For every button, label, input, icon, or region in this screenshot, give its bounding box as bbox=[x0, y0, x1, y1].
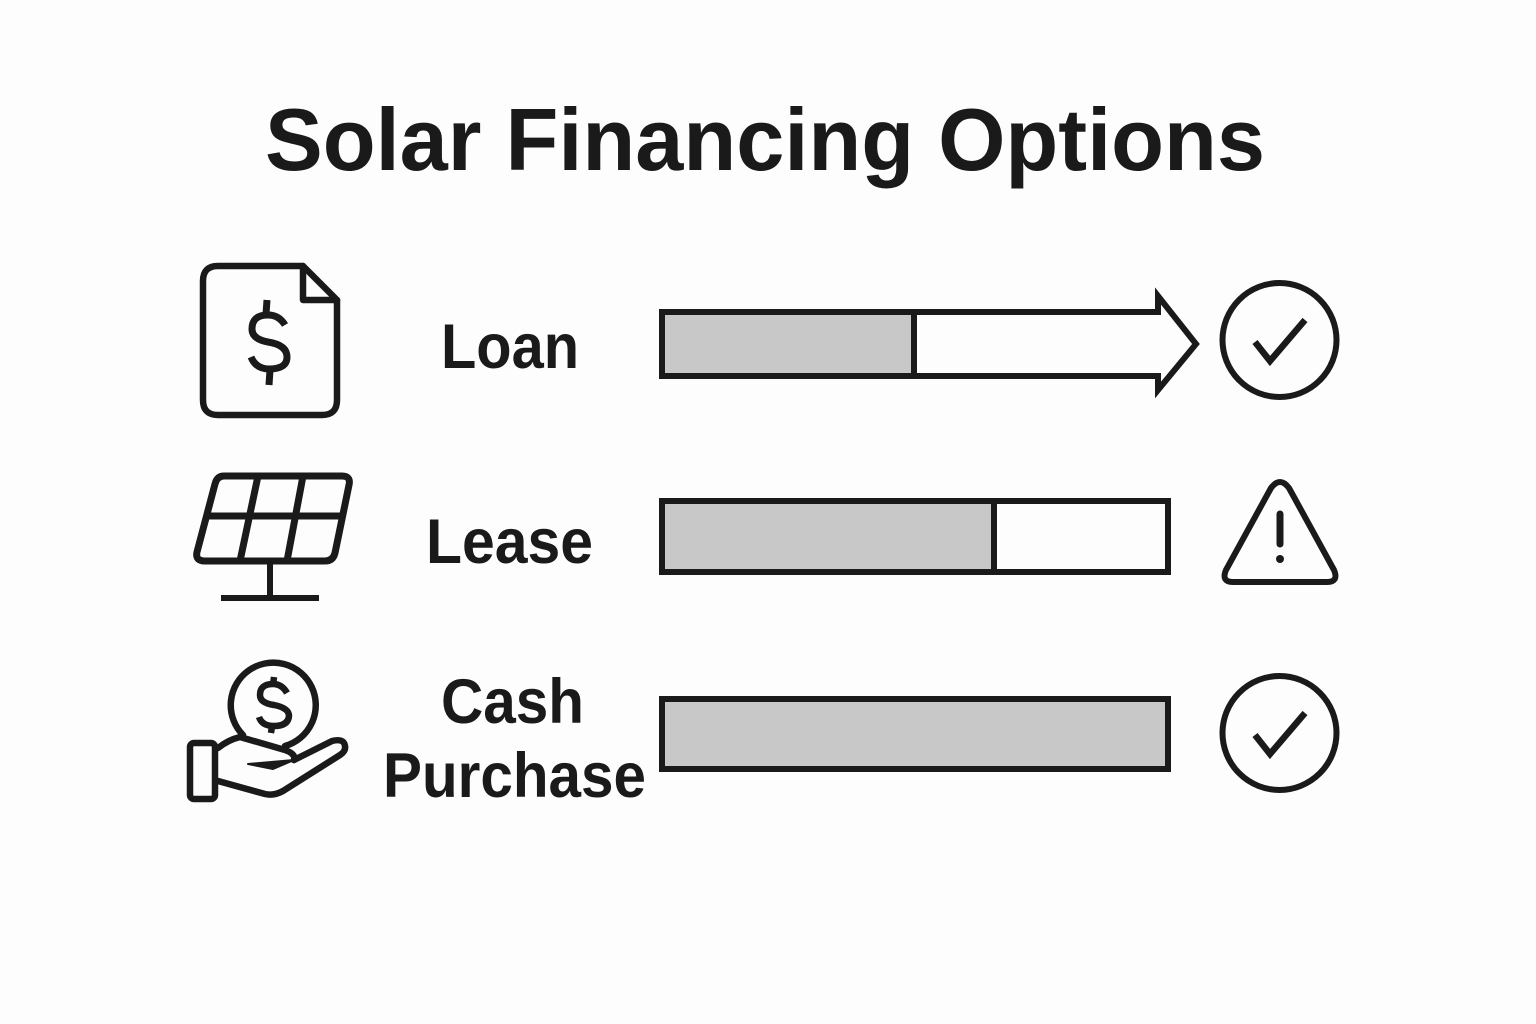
row: lease bbox=[197, 476, 1335, 598]
title: Solar Financing Options bbox=[265, 90, 1265, 189]
icon: document with dollar sign bbox=[203, 266, 337, 415]
icon: warning triangle bbox=[1225, 482, 1335, 582]
icon: check circle bbox=[1222, 283, 1336, 397]
label: lease: Lease bbox=[426, 507, 593, 577]
row: loan bbox=[203, 266, 1336, 415]
label: cash purchase bbox=[383, 667, 646, 811]
bar: cash purchase bbox=[662, 699, 1168, 769]
bar: loan arrow bbox=[662, 296, 1196, 390]
label: loan: Loan bbox=[441, 312, 579, 382]
icon: solar panel bbox=[197, 476, 349, 598]
row: cash purchase bbox=[190, 663, 1336, 811]
label: cash purchase: Purchase bbox=[383, 741, 646, 811]
bar: lease bbox=[662, 501, 1168, 572]
label: cash purchase: Cash bbox=[441, 667, 584, 737]
icon: hand holding coin bbox=[190, 663, 345, 799]
icon: check circle bbox=[1222, 676, 1336, 790]
